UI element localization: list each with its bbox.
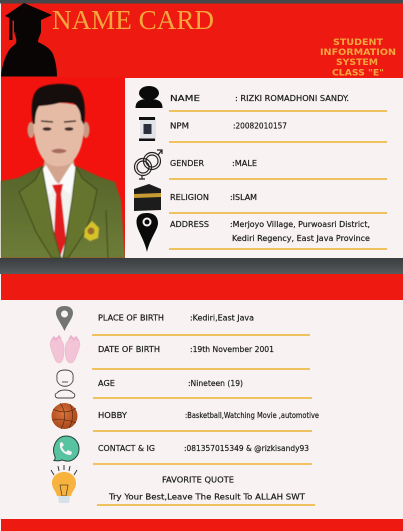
icon: whatsapp <box>54 436 79 461</box>
row: age: :Nineteen (19) <box>188 379 243 388</box>
panel: additional details <box>1 300 403 519</box>
row: name: NAME <box>170 94 200 103</box>
row: date of birth: DATE OF BIRTH <box>98 345 160 354</box>
row: date of birth: :19th November 2001 <box>190 345 274 354</box>
graduate silhouette icon <box>1 3 57 76</box>
portrait photo <box>1 77 125 258</box>
row: contact: CONTACT & IG <box>98 444 155 453</box>
icon: person <box>136 86 162 108</box>
bottom red band <box>1 519 403 531</box>
row: religion <box>169 193 387 214</box>
row: hobby: HOBBY <box>98 411 127 420</box>
row: npm: :20082010157 <box>233 122 287 130</box>
row: contact: :081357015349 & @rizkisandy93 <box>184 444 309 453</box>
icon: gender rings <box>134 150 162 179</box>
row: age: AGE <box>98 379 115 388</box>
row: religion: :ISLAM <box>230 193 257 202</box>
row: hobby: :Basketball,Watching Movie ,automotive <box>185 411 319 420</box>
favorite quote: Try Your Best,Leave The Result To ALLAH SWT <box>108 492 305 502</box>
red middle band <box>1 274 403 300</box>
row: address: ADDRESS <box>170 220 209 229</box>
row: gender: GENDER <box>170 159 204 168</box>
red header band <box>1 4 403 80</box>
row: hobby <box>93 411 319 432</box>
subtitle: INFORMATION <box>320 48 396 58</box>
row: name: : RIZKI ROMADHONI SANDY. <box>235 94 349 103</box>
row: address <box>169 220 387 250</box>
row: date of birth <box>92 345 310 370</box>
icon: id card <box>139 117 156 141</box>
row: age <box>93 379 312 399</box>
top dark strip <box>0 0 403 4</box>
row: place of birth: PLACE OF BIRTH <box>98 314 164 322</box>
icon: map pin <box>56 306 73 331</box>
row: contact <box>93 444 312 465</box>
row: place of birth: :Kediri,East Java <box>190 314 254 322</box>
icon: boy avatar <box>55 370 75 398</box>
row: place of birth <box>92 314 310 336</box>
subtitle: STUDENT <box>333 38 383 48</box>
dark separator band <box>0 258 403 274</box>
icon: kaaba <box>134 184 161 211</box>
icon: location pin <box>136 213 158 252</box>
subtitle <box>320 38 396 78</box>
row: gender <box>169 159 387 180</box>
favorite quote: FAVORITE QUOTE <box>162 476 234 484</box>
row: npm: NPM <box>170 122 189 130</box>
favorite quote <box>97 476 315 506</box>
row: address: Kediri Regency, East Java Province <box>232 234 370 243</box>
panel: personal details <box>125 78 403 258</box>
row: address: :Merjoyo Village, Purwoasri District, <box>230 220 370 229</box>
icon: baby feet <box>50 336 80 363</box>
icon: basketball <box>52 403 78 429</box>
subtitle: SYSTEM <box>336 58 378 68</box>
icon: light bulb <box>51 465 77 503</box>
title: NAME CARD <box>52 5 214 35</box>
row: religion: RELIGION <box>170 193 209 202</box>
row: gender: :MALE <box>232 159 257 168</box>
row: name <box>169 94 387 112</box>
row: npm <box>169 122 387 143</box>
subtitle: CLASS "E" <box>332 68 384 78</box>
